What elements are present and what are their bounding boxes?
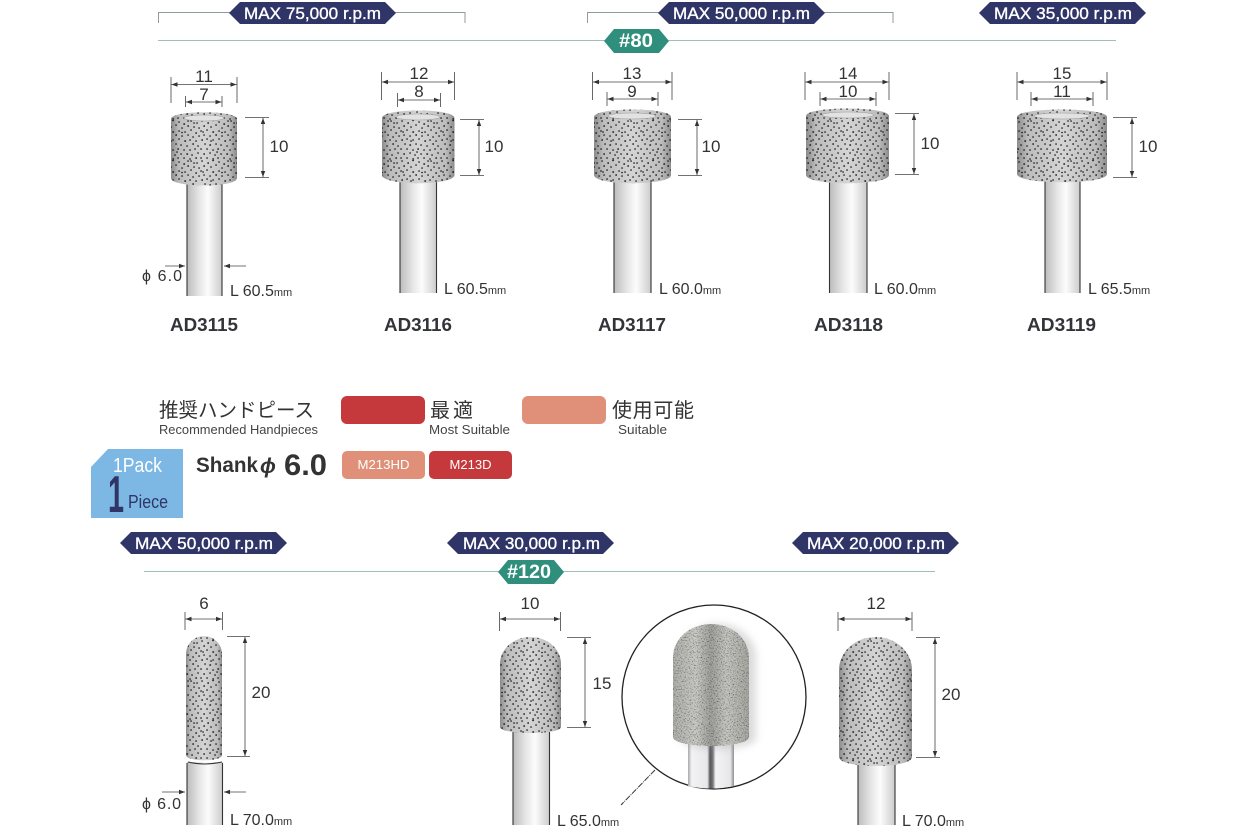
tool: AD3118: 10 (921, 134, 939, 153)
tool: round-end 10 x 15 (500, 594, 619, 830)
tool: AD3117: 13 (623, 64, 641, 83)
grit heading: #120: #120 (507, 562, 551, 583)
tool: AD3115: 10 (270, 137, 288, 156)
handpiece tag: M213D: M213D (450, 457, 492, 472)
legend: recommended handpieces (159, 396, 694, 437)
legend: recommended handpieces: 使用可能 (612, 399, 694, 422)
tool: round-end 10 x 15: 15 (593, 674, 611, 693)
tool: round-end 10 x 15: 10 (521, 594, 539, 613)
pack badge: 1 pack 1 piece (91, 449, 183, 524)
handpiece tag: M213HD (342, 451, 425, 479)
legend: recommended handpieces: 最適 (430, 399, 473, 422)
tool: round-end 6 x 20: 20 (252, 683, 270, 702)
shank size heading: ϕ (260, 455, 276, 478)
speed badge: MAX 20,000: MAX 20,000 r.p.m (807, 534, 945, 553)
tool: round-end 6 x 20: 6 (199, 594, 209, 613)
pack badge: 1 pack 1 piece: 1Pack (113, 455, 163, 477)
tool: AD3116 (382, 64, 506, 335)
tool: AD3117 (592, 64, 721, 335)
tool: AD3117: 10 (702, 137, 720, 156)
handpiece tag: M213D (429, 451, 512, 479)
tool: AD3117: L 60.0mm (659, 281, 721, 298)
tool: round-end 10 x 15: L 65.0mm (557, 813, 619, 830)
handpiece tag: M213HD: M213HD (358, 457, 410, 472)
tool: round-end 6 x 20: L 70.0mm (230, 812, 292, 829)
grit heading: #80 (158, 29, 1116, 53)
legend: recommended handpieces: Suitable (618, 422, 667, 437)
grit heading: #80: #80 (619, 31, 653, 52)
tool: AD3119: AD3119 (1027, 315, 1096, 335)
tool: AD3115: ϕ 6.0 (142, 268, 182, 285)
tool: AD3118: AD3118 (814, 315, 883, 335)
tool: AD3117: 9 (627, 82, 637, 101)
tool: AD3119: 11 (1053, 82, 1071, 101)
grit heading: #120 (144, 560, 935, 584)
pack badge: 1 pack 1 piece: Piece (128, 492, 168, 512)
tool: AD3119: 15 (1053, 64, 1071, 83)
tool: AD3116: 10 (485, 137, 503, 156)
shank size heading: Shank (196, 454, 258, 477)
speed badge: MAX 75,000: MAX 75,000 r.p.m (244, 4, 381, 23)
tool: AD3116: L 60.5mm (444, 281, 506, 298)
tool: AD3115: 7 (199, 85, 209, 104)
tool: AD3119: 10 (1139, 137, 1157, 156)
legend: recommended handpieces: Recommended Handpieces (159, 422, 318, 437)
tool: AD3118 (805, 64, 939, 335)
tool: round-end 6 x 20 (142, 594, 292, 829)
shank size heading (196, 449, 327, 482)
shank size heading: 6.0 (284, 449, 327, 482)
tool: AD3119: L 65.5mm (1088, 281, 1150, 298)
pack badge: 1 pack 1 piece: 1 (108, 466, 124, 524)
speed badge: MAX 50,000 lower: MAX 50,000 r.p.m (135, 534, 273, 553)
tool: AD3116: AD3116 (384, 315, 452, 335)
tool: AD3116: 8 (414, 82, 424, 101)
tool: round-end 12 x 20: 20 (942, 685, 960, 704)
legend: recommended handpieces: 推奨ハンドピース (159, 399, 314, 422)
tool: AD3115: 11 (195, 67, 213, 86)
speed badge: MAX 50,000 (588, 2, 893, 24)
tool: AD3116: 12 (410, 64, 428, 83)
tool: AD3117: AD3117 (598, 315, 666, 335)
speed badge: MAX 75,000 (158, 2, 465, 24)
speed badge: MAX 50,000: MAX 50,000 r.p.m (673, 4, 810, 23)
tool: round-end 12 x 20 (838, 594, 964, 830)
speed badge: MAX 30,000: MAX 30,000 r.p.m (463, 534, 600, 553)
tool: round-end 12 x 20: 12 (867, 594, 885, 613)
tool: AD3118: 14 (839, 64, 857, 83)
tool: AD3115 (142, 67, 292, 335)
magnified photo inset with leader (621, 605, 806, 805)
tool: AD3118: 10 (839, 82, 857, 101)
tool: AD3119 (1017, 64, 1157, 335)
tool: AD3118: L 60.0mm (874, 281, 936, 298)
tool: round-end 6 x 20: ϕ 6.0 (142, 796, 181, 813)
tool: AD3115: AD3115 (170, 315, 238, 335)
speed badge: MAX 35,000: MAX 35,000 r.p.m (994, 4, 1132, 23)
tool: AD3115: L 60.5mm (230, 283, 292, 300)
legend: recommended handpieces: Most Suitable (429, 422, 510, 437)
tool: round-end 12 x 20: L 70.0mm (902, 813, 964, 830)
